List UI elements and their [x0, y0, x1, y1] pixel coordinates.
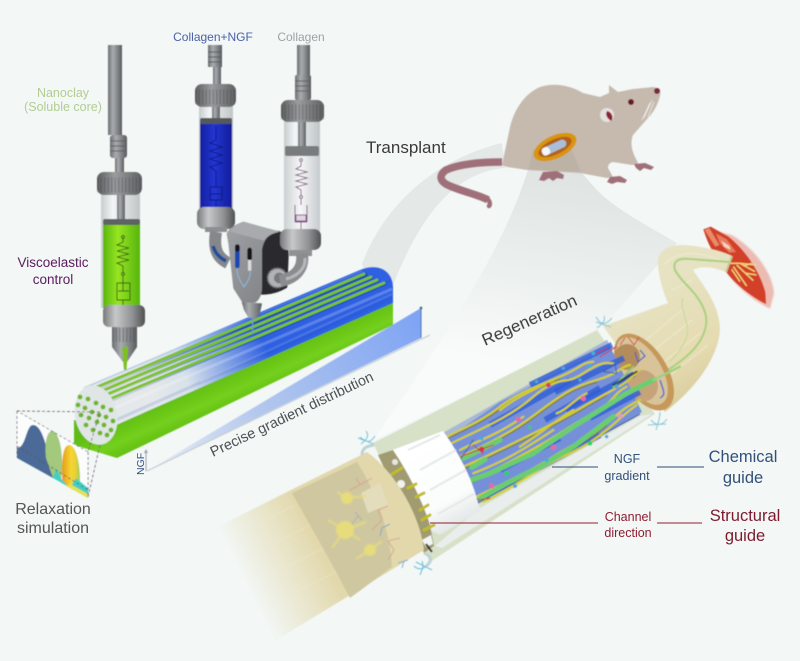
label: viscoelastic control: Viscoelastic — [17, 255, 89, 270]
viscoelastic model — [295, 159, 307, 233]
upper channel wall — [443, 340, 610, 438]
cells — [479, 351, 623, 489]
hind foot — [539, 171, 564, 181]
tail — [441, 162, 502, 200]
body — [502, 85, 660, 178]
whiskers — [642, 100, 654, 120]
beam seen through belly — [528, 150, 581, 172]
elbow connector — [215, 232, 228, 263]
muscle body — [703, 227, 766, 304]
callout: channel direction: direction — [604, 526, 652, 540]
label: collagen: Collagen — [277, 30, 325, 44]
green base of scaffold — [74, 298, 393, 458]
label: structural guide: guide — [725, 527, 765, 545]
syringe: collagen — [280, 45, 324, 281]
proximal nerve sheath — [215, 452, 424, 642]
regenerated distal nerve — [603, 245, 732, 412]
flow beam: regeneration — [373, 170, 677, 440]
black channel slot — [247, 248, 252, 260]
lower white strip — [435, 414, 652, 548]
label: structural guide: Structural — [710, 507, 780, 525]
blue relaxation curve — [17, 425, 53, 478]
eye — [628, 99, 634, 105]
fibre bundle with blue gradient — [83, 267, 393, 425]
syringe: collagen with NGF — [195, 45, 236, 263]
scaffold end face — [69, 381, 123, 449]
inner channel — [443, 340, 642, 503]
transparent conduit sleeve — [373, 330, 655, 562]
callout: NGF gradient: NGF — [614, 452, 641, 466]
label: chemical guide — [709, 448, 777, 487]
distal cut face — [726, 256, 732, 272]
callout: NGF gradient — [552, 452, 704, 483]
axons — [447, 347, 680, 502]
label: structural guide — [710, 507, 780, 545]
suture: right — [648, 412, 667, 430]
flow beam: transplant — [362, 143, 505, 285]
dendrites — [350, 478, 408, 568]
heat-map relaxation curve — [62, 445, 80, 493]
suture: upper right — [596, 316, 612, 328]
relaxation simulation inset — [17, 411, 100, 498]
muscle fibres — [705, 228, 736, 253]
callout: channel direction — [430, 510, 702, 540]
viscoelastic model — [117, 236, 130, 311]
front foot — [634, 163, 654, 171]
feed lines — [237, 268, 250, 287]
callout: NGF gradient: gradient — [604, 469, 650, 483]
white proximal conduit section — [390, 431, 481, 535]
suture: lower — [414, 553, 432, 575]
blue channel slot — [235, 244, 240, 268]
syringe: nanoclay — [97, 45, 145, 370]
printed gradient scaffold — [69, 267, 393, 458]
channel blue bands — [490, 345, 640, 478]
nose — [654, 88, 660, 94]
translucent window band — [292, 462, 392, 598]
label: precise gradient distribution: Precise gradient distribution — [208, 369, 376, 461]
viscoelastic model — [210, 126, 222, 209]
grey front block — [227, 222, 280, 304]
heat-map floor — [53, 468, 88, 498]
dark side housing — [258, 231, 289, 295]
label: NGF axis: NGF — [135, 453, 147, 475]
label: viscoelastic control — [17, 255, 89, 287]
proximal channel ends — [378, 450, 434, 553]
label: nanoclay: Nanoclay — [37, 86, 90, 100]
label: relaxation simulation — [15, 501, 91, 537]
green axon — [668, 259, 730, 370]
suture: upper left — [358, 431, 375, 455]
label: nanoclay — [24, 86, 102, 114]
rat — [441, 85, 660, 206]
print head — [227, 222, 289, 333]
label: chemical guide: Chemical — [709, 448, 777, 466]
conduit interior — [435, 323, 686, 548]
front foot — [607, 176, 627, 184]
muscle halo — [712, 230, 774, 309]
neurons — [328, 492, 382, 559]
label: transplant: Transplant — [366, 138, 446, 157]
label: regeneration: Regeneration — [479, 291, 580, 350]
ear — [600, 108, 614, 122]
label: relaxation simulation: simulation — [17, 520, 89, 537]
nozzle — [242, 302, 262, 319]
label: nanoclay: (Soluble core) — [24, 100, 102, 114]
callout: channel direction: Channel — [605, 510, 651, 524]
soluble core stripes — [85, 274, 385, 402]
label: collagen plus NGF: Collagen+NGF — [173, 30, 253, 44]
label: chemical guide: guide — [723, 469, 763, 487]
NGF gradient wedge — [144, 307, 430, 471]
muscle target — [703, 227, 774, 309]
label: viscoelastic control: control — [33, 272, 73, 287]
nerve endings — [728, 263, 757, 286]
label: relaxation simulation: Relaxation — [15, 501, 91, 518]
green relaxation curve — [45, 431, 62, 482]
elbow connector — [280, 254, 302, 281]
distal cross section — [602, 323, 686, 421]
implant — [529, 127, 581, 167]
gear wheel — [268, 268, 287, 288]
